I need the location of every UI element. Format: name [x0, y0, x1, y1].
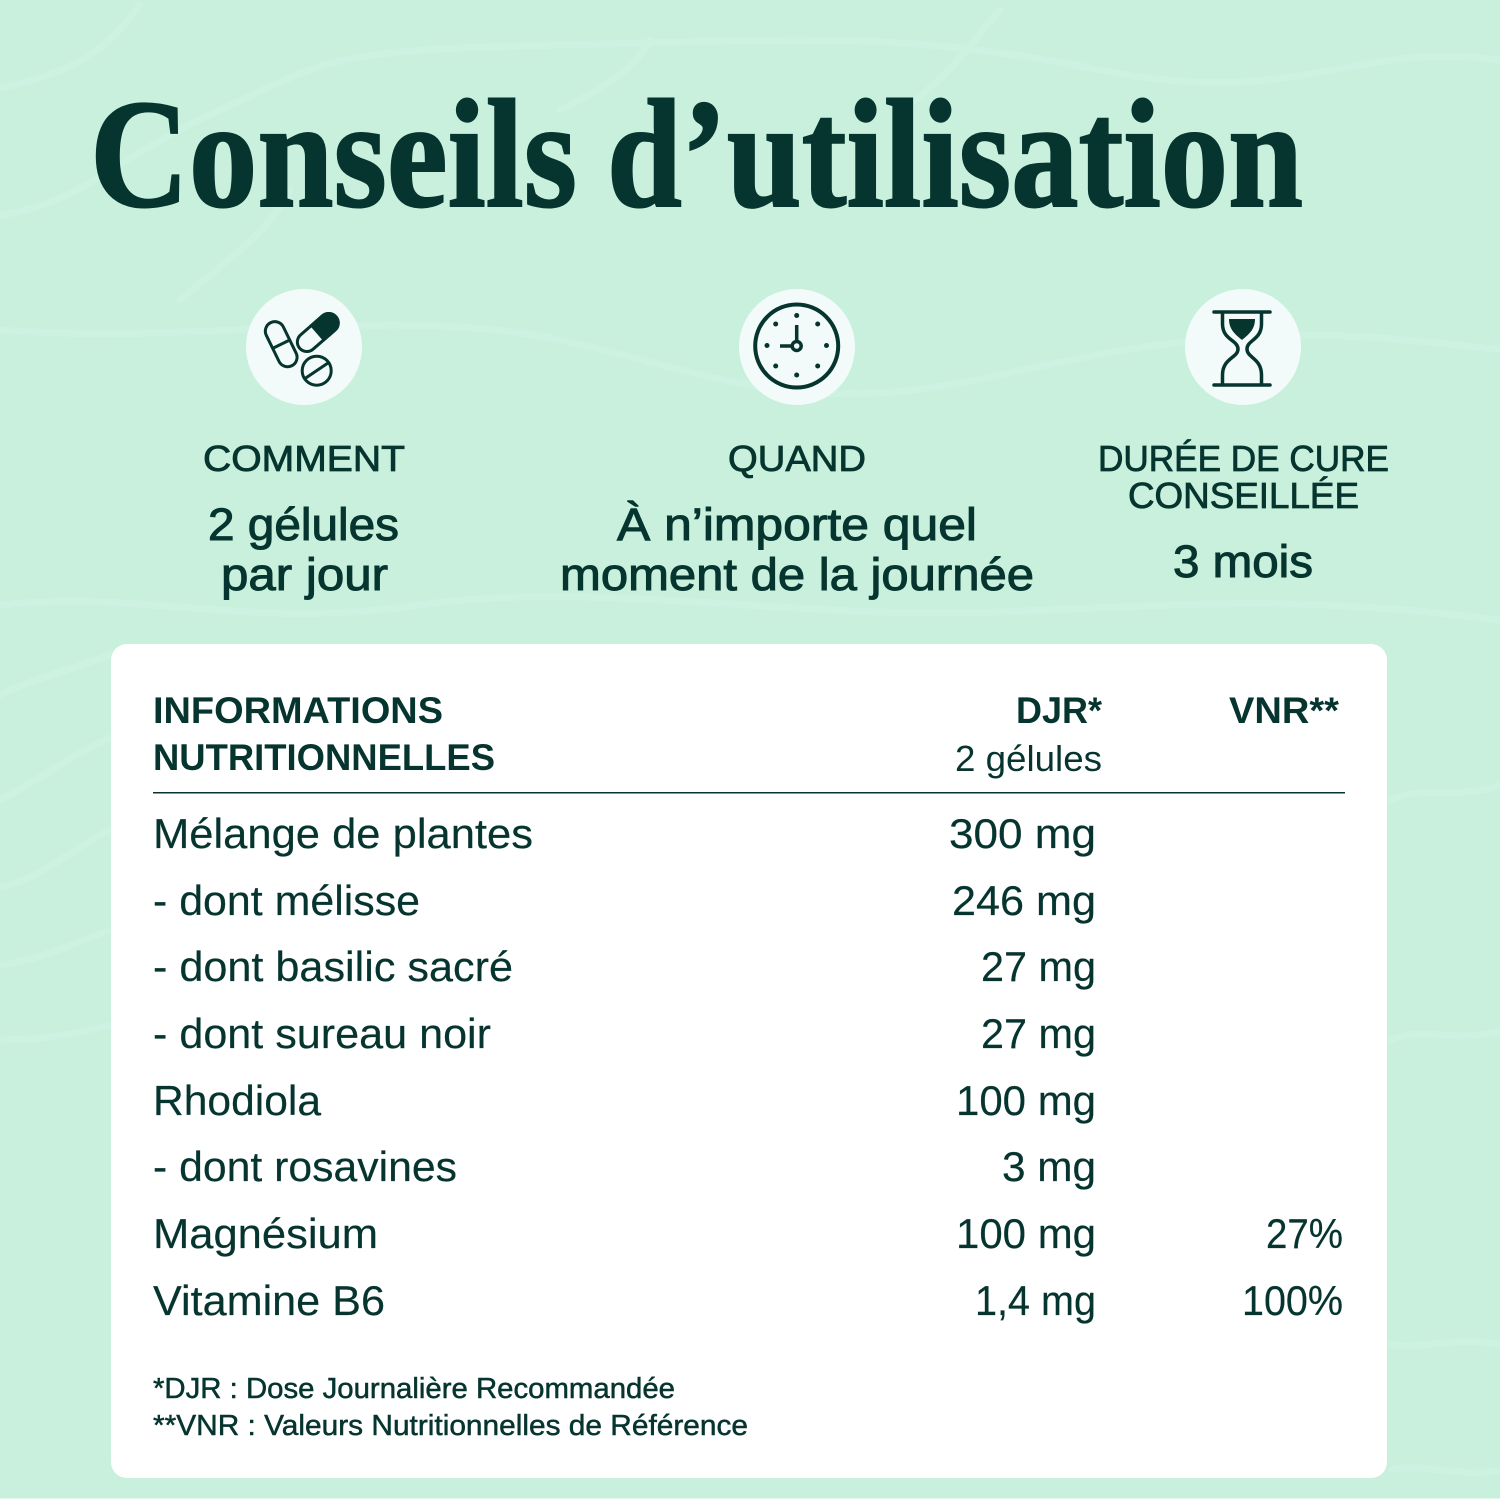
- panel: quand: [560, 289, 1034, 600]
- title: [90, 68, 1303, 240]
- heading: comment: COMMENT: [203, 438, 405, 479]
- heading: duree: CONSEILLÉE: [1128, 475, 1359, 516]
- row: sureau noir: - dont sureau noir: [153, 1010, 491, 1057]
- heading: duree: DURÉE DE CURE: [1098, 438, 1389, 479]
- row: rosavines: [153, 1143, 1096, 1190]
- table header: DJR*: [1016, 690, 1103, 731]
- footnotes: **VNR : Valeurs Nutritionnelles de Référence: [153, 1410, 748, 1442]
- row: magnesium: 100 mg: [956, 1210, 1096, 1257]
- row: magnesium: [153, 1210, 1343, 1257]
- row: rhodiola: Rhodiola: [153, 1077, 322, 1124]
- heading: quand: QUAND: [728, 438, 866, 479]
- panel: nutrition table: [111, 644, 1387, 1478]
- table header: [153, 690, 1340, 779]
- row: basilic sacre: [153, 943, 1096, 990]
- row: melisse: - dont mélisse: [153, 877, 420, 924]
- text: dosage: [208, 499, 399, 600]
- icon: hourglass: [1185, 289, 1301, 405]
- heading: duree: [1098, 438, 1389, 516]
- row: rhodiola: 100 mg: [956, 1077, 1096, 1124]
- row: vitamine b6: [153, 1277, 1343, 1324]
- row: basilic sacre: 27 mg: [981, 943, 1096, 990]
- icon: pills: [246, 289, 362, 405]
- row: melange de plantes: [153, 810, 1096, 857]
- row: vitamine b6: 100%: [1242, 1277, 1343, 1324]
- row: melange de plantes: Mélange de plantes: [153, 810, 533, 857]
- title: Conseils: [90, 68, 577, 240]
- row: basilic sacre: - dont basilic sacré: [153, 943, 513, 990]
- table header: NUTRITIONNELLES: [153, 737, 495, 778]
- panel: duree: [1098, 289, 1389, 587]
- row: melange de plantes: 300 mg: [949, 810, 1096, 857]
- footnotes: [153, 1373, 748, 1442]
- footnotes: *DJR : Dose Journalière Recommandée: [153, 1373, 675, 1405]
- row: magnesium: 27%: [1266, 1210, 1343, 1257]
- title: d’utilisation: [607, 68, 1303, 240]
- text: timing: moment de la journée: [560, 549, 1034, 600]
- table header: VNR**: [1229, 690, 1340, 731]
- panel: comment: [203, 289, 405, 600]
- text: dosage: par jour: [221, 549, 388, 600]
- row: magnesium: Magnésium: [153, 1210, 378, 1257]
- row: melisse: [153, 877, 1096, 924]
- table header: INFORMATIONS: [153, 690, 443, 731]
- row: vitamine b6: 1,4 mg: [975, 1277, 1096, 1324]
- row: rosavines: - dont rosavines: [153, 1143, 457, 1190]
- text: timing: [560, 499, 1034, 600]
- row: sureau noir: 27 mg: [981, 1010, 1096, 1057]
- row: rosavines: 3 mg: [1002, 1143, 1096, 1190]
- text: 3 mois: 3 mois: [1173, 536, 1313, 587]
- row: rhodiola: [153, 1077, 1096, 1124]
- row: melisse: 246 mg: [952, 877, 1096, 924]
- table header: 2 gélules: [955, 738, 1102, 779]
- icon: clock: [739, 289, 855, 405]
- text: timing: À n’importe quel: [617, 499, 977, 550]
- text: dosage: 2 gélules: [208, 499, 399, 550]
- row: sureau noir: [153, 1010, 1096, 1057]
- row: vitamine b6: Vitamine B6: [153, 1277, 385, 1324]
